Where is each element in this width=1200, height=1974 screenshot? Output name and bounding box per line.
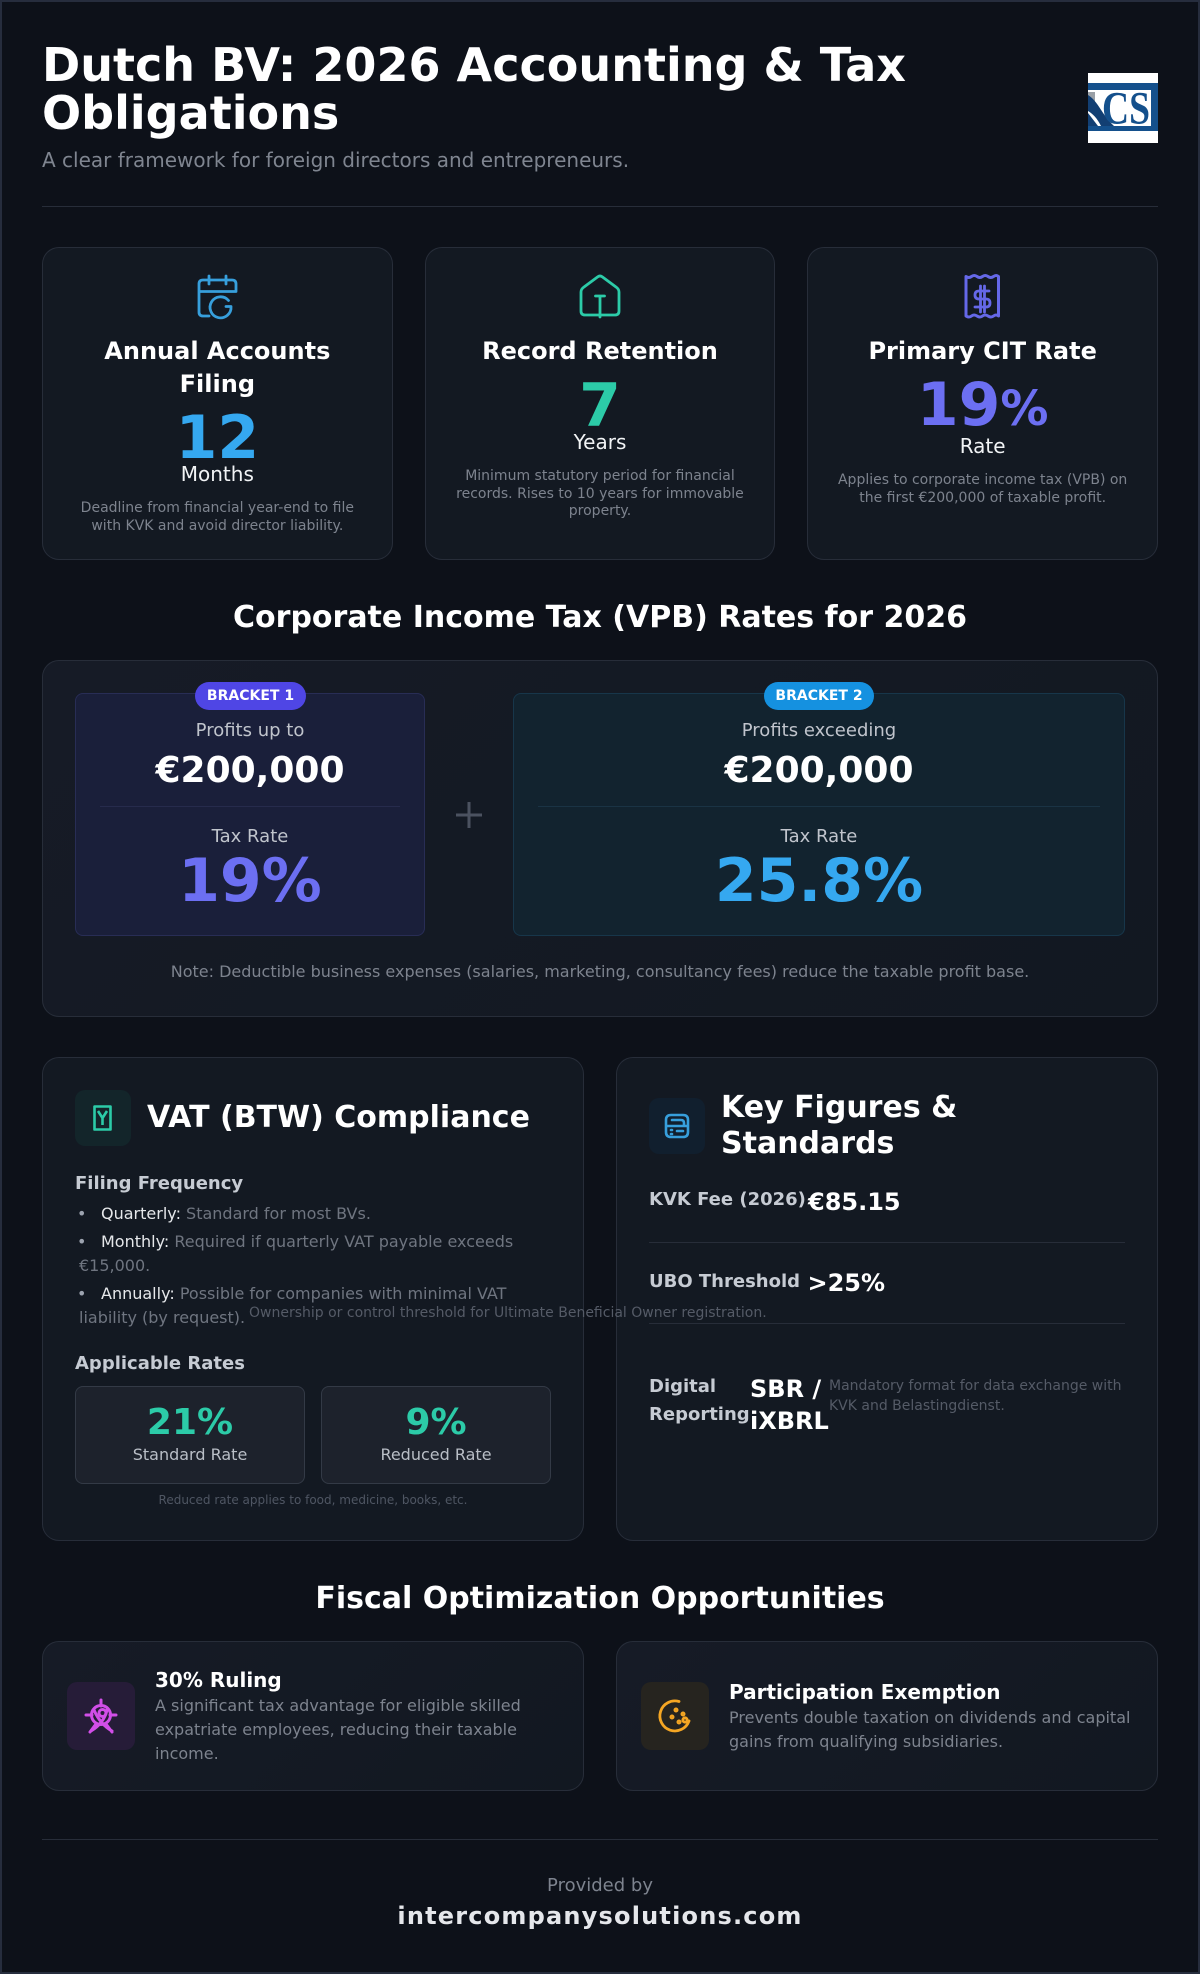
footer URL: intercompanysolutions.com [397, 1902, 803, 1930]
label: Tax Rate [781, 826, 857, 847]
description: the first €200,000 of taxable profit. [859, 490, 1106, 506]
rate: reduced [321, 1386, 551, 1484]
section heading: VPB rates: Corporate Income Tax (VPB) Rates for 2026 [233, 600, 967, 635]
label: UBO Threshold [649, 1271, 800, 1292]
title: Dutch BV: 2026 Accounting & Tax [42, 38, 906, 92]
badge: bracket 1 [195, 682, 306, 710]
card heading: Record Retention [482, 337, 718, 365]
icon: calendar with clock [198, 274, 238, 320]
bracket 1 [75, 693, 425, 936]
label: Tax Rate [212, 826, 288, 847]
filing frequency list: €15,000. [79, 1256, 150, 1275]
label: Reporting [649, 1404, 750, 1424]
description: with KVK and avoid director liability. [91, 518, 343, 534]
card heading [104, 337, 330, 398]
label: KVK Fee (2026) [649, 1189, 806, 1210]
panel: key figures [616, 1057, 1158, 1541]
panel heading: VAT (BTW) Compliance [147, 1100, 530, 1135]
panel: primary CIT rate [807, 247, 1158, 560]
value: SBR / [750, 1374, 821, 1402]
card heading: Primary CIT Rate [868, 337, 1097, 365]
description: KVK and Belastingdienst. [829, 1398, 1005, 1414]
value: >25% [808, 1269, 885, 1297]
subheading: applicable rates: Applicable Rates [75, 1353, 245, 1374]
unit: Months [181, 462, 254, 486]
description: Mandatory format for data exchange with [829, 1378, 1121, 1394]
description: Applies to corporate income tax (VPB) on [838, 472, 1127, 488]
panel heading [721, 1090, 957, 1160]
icon: house [580, 274, 620, 318]
description: income. [155, 1744, 219, 1763]
description: Ownership or control threshold for Ultimate Beneficial Owner registration. [249, 1305, 767, 1321]
label: Digital [649, 1376, 716, 1396]
card heading: Filing [180, 370, 255, 398]
panel: VAT compliance [42, 1057, 584, 1541]
row: KVK fee [649, 1188, 901, 1216]
filing frequency list: Quarterly: Standard for most BVs. [101, 1204, 371, 1223]
threshold: €200,000 [724, 750, 914, 791]
heading: 30% Ruling [155, 1668, 282, 1692]
rate: standard [75, 1386, 305, 1484]
label: Profits up to [196, 720, 304, 741]
label: Reduced Rate [380, 1445, 492, 1464]
description [456, 468, 744, 519]
icon: participation exemption [641, 1682, 709, 1750]
badge: bracket 1: BRACKET 1 [207, 688, 294, 704]
icon: 30% ruling [67, 1682, 135, 1750]
plus sign [456, 802, 482, 828]
panel: record retention [425, 247, 775, 560]
footnote: Reduced rate applies to food, medicine, books, etc. [159, 1493, 467, 1507]
big number: 19% [917, 370, 1048, 440]
badge: bracket 2: BRACKET 2 [775, 688, 863, 704]
description: property. [569, 503, 631, 519]
big number: 12 [176, 403, 259, 473]
section heading: fiscal optimization: Fiscal Optimization Opportunities [315, 1581, 885, 1616]
panel: annual accounts filing [42, 247, 393, 560]
filing frequency list [77, 1204, 513, 1327]
icon: VAT document [75, 1090, 131, 1146]
label: Standard Rate [133, 1445, 247, 1464]
unit: Rate [960, 434, 1006, 458]
footer divider [42, 1839, 1158, 1840]
description: Prevents double taxation on dividends and capital [729, 1708, 1130, 1727]
big number: 7 [579, 371, 621, 441]
bracket 2 [513, 693, 1125, 936]
rate: 25.8% [715, 846, 923, 916]
footer label: Provided by [547, 1875, 653, 1896]
filing frequency list: Annually: Possible for companies with minimal VAT [101, 1284, 506, 1303]
unit: Years [574, 430, 626, 454]
logo [1088, 73, 1158, 143]
description [729, 1708, 1130, 1751]
heading: Participation Exemption [729, 1680, 1000, 1704]
description: gains from qualifying subsidiaries. [729, 1732, 1003, 1751]
value: 9% [405, 1402, 467, 1443]
panel heading: Key Figures & [721, 1090, 957, 1124]
filing frequency list: • [77, 1232, 86, 1251]
panel: 30% ruling [42, 1641, 584, 1791]
panel: participation exemption [616, 1641, 1158, 1791]
row: digital reporting [649, 1374, 1121, 1434]
filing frequency list: liability (by request). [79, 1308, 245, 1327]
badge: bracket 2 [764, 682, 874, 710]
description: Minimum statutory period for financial [465, 468, 735, 484]
value: €85.15 [808, 1188, 901, 1216]
icon: tax receipt [964, 274, 1000, 318]
rate: 19% [178, 846, 322, 916]
value [750, 1374, 829, 1434]
filing frequency list: • [77, 1204, 86, 1223]
panel heading: Standards [721, 1126, 894, 1160]
title [42, 38, 906, 140]
icon: calculator form [649, 1098, 705, 1154]
panel: VPB rates [42, 660, 1158, 1017]
threshold: €200,000 [155, 750, 345, 791]
value: 21% [147, 1402, 233, 1443]
note: Note: Deductible business expenses (salaries, marketing, consultancy fees) reduce the taxable profit base. [171, 962, 1029, 981]
description: A significant tax advantage for eligible skilled [155, 1696, 521, 1715]
header divider [42, 206, 1158, 207]
subtitle: A clear framework for foreign directors and entrepreneurs. [42, 148, 629, 172]
label [649, 1376, 750, 1424]
title: Obligations [42, 86, 339, 140]
description [829, 1378, 1121, 1414]
row: UBO threshold [249, 1269, 885, 1321]
description: expatriate employees, reducing their taxable [155, 1720, 517, 1739]
description: Deadline from financial year-end to file [81, 500, 354, 516]
filing frequency list: Monthly: Required if quarterly VAT payable exceeds [101, 1232, 513, 1251]
value: iXBRL [750, 1406, 829, 1434]
filing frequency list: • [77, 1284, 86, 1303]
description [155, 1696, 521, 1763]
description: records. Rises to 10 years for immovable [456, 486, 744, 502]
description [81, 500, 354, 534]
label: Profits exceeding [742, 720, 896, 741]
subheading: filing frequency: Filing Frequency [75, 1173, 243, 1194]
card heading: Annual Accounts [104, 337, 330, 365]
description [838, 472, 1127, 506]
